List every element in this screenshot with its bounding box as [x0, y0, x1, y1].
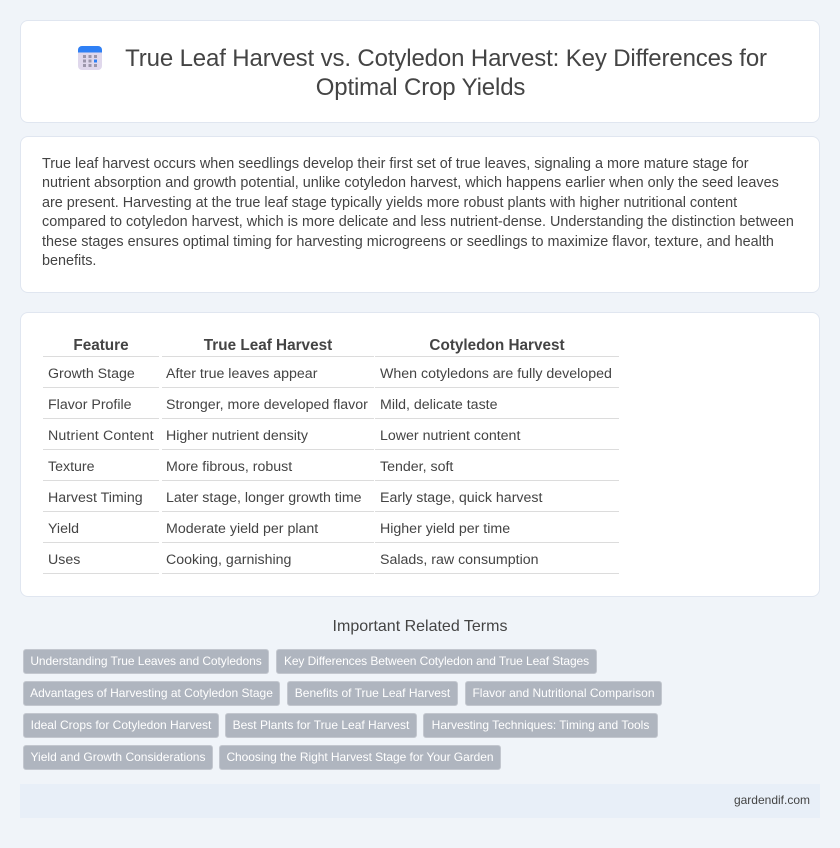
table [43, 337, 619, 574]
icon: calendar [78, 46, 102, 70]
table: Cooking, garnishing [166, 552, 291, 568]
related terms tags: Ideal Crops for Cotyledon Harvest [31, 718, 211, 732]
related terms tags: Benefits of True Leaf Harvest [295, 686, 450, 700]
related terms tags: Yield and Growth Considerations [30, 750, 205, 764]
intro text [42, 156, 794, 269]
related terms tags: Harvesting Techniques: Timing and Tools [432, 718, 649, 732]
related terms tags: Choosing the Right Harvest Stage for Your Garden [226, 750, 494, 764]
table: Harvest Timing [48, 490, 143, 506]
title [125, 45, 767, 101]
title: True Leaf Harvest vs. Cotyledon Harvest: Key Differences for [125, 45, 767, 72]
table: True Leaf Harvest [204, 337, 332, 354]
table: Higher nutrient density [166, 428, 308, 444]
table: Uses [48, 552, 80, 568]
table: Nutrient Content [48, 428, 154, 444]
intro text: compared to cotyledon harvest, which is more delicate and less nutrient-dense. Understanding the distinction between [42, 214, 794, 230]
related terms tags: Best Plants for True Leaf Harvest [233, 718, 409, 732]
related terms tags: Advantages of Harvesting at Cotyledon Stage [30, 686, 273, 700]
table: Stronger, more developed flavor [166, 397, 368, 413]
table: Flavor Profile [48, 397, 132, 413]
intro text: these stages ensures optimal timing for harvesting microgreens or seedlings to maximize flavor, texture, and health [42, 234, 774, 250]
intro paragraph card [20, 136, 820, 293]
related terms tags: Understanding True Leaves and Cotyledons [30, 654, 262, 668]
table: Mild, delicate taste [380, 397, 498, 413]
table: Moderate yield per plant [166, 521, 318, 537]
header card [20, 20, 820, 123]
footer credit: gardendif.com [734, 793, 810, 807]
related terms tags: Flavor and Nutritional Comparison [472, 686, 655, 700]
table: Feature [73, 337, 129, 354]
table: Later stage, longer growth time [166, 490, 362, 506]
table: Yield [48, 521, 79, 537]
footer bar [20, 784, 820, 818]
intro text: are present. Harvesting at the true leaf stage typically yields more robust plants with higher nutritional content [42, 195, 737, 211]
table: Cotyledon Harvest [429, 337, 565, 354]
intro text: nutrient absorption and growth potential, unlike cotyledon harvest, which happens earlier when only the seed leaves [42, 175, 779, 191]
table: Salads, raw consumption [380, 552, 539, 568]
table: Lower nutrient content [380, 428, 520, 444]
comparison table card [20, 312, 820, 597]
table: Higher yield per time [380, 521, 510, 537]
table: More fibrous, robust [166, 459, 292, 475]
related terms tags [23, 649, 662, 770]
intro text: benefits. [42, 253, 96, 269]
table: After true leaves appear [166, 366, 317, 382]
table: When cotyledons are fully developed [380, 366, 612, 382]
title: Optimal Crop Yields [316, 74, 525, 101]
intro text: True leaf harvest occurs when seedlings develop their first set of true leaves, signaling a more mature stage for [42, 156, 749, 172]
table: Growth Stage [48, 366, 135, 382]
related terms heading: Important Related Terms [333, 618, 507, 635]
table: Tender, soft [380, 459, 453, 475]
table: Early stage, quick harvest [380, 490, 542, 506]
table: Texture [48, 459, 95, 475]
related terms tags: Key Differences Between Cotyledon and True Leaf Stages [284, 654, 589, 668]
